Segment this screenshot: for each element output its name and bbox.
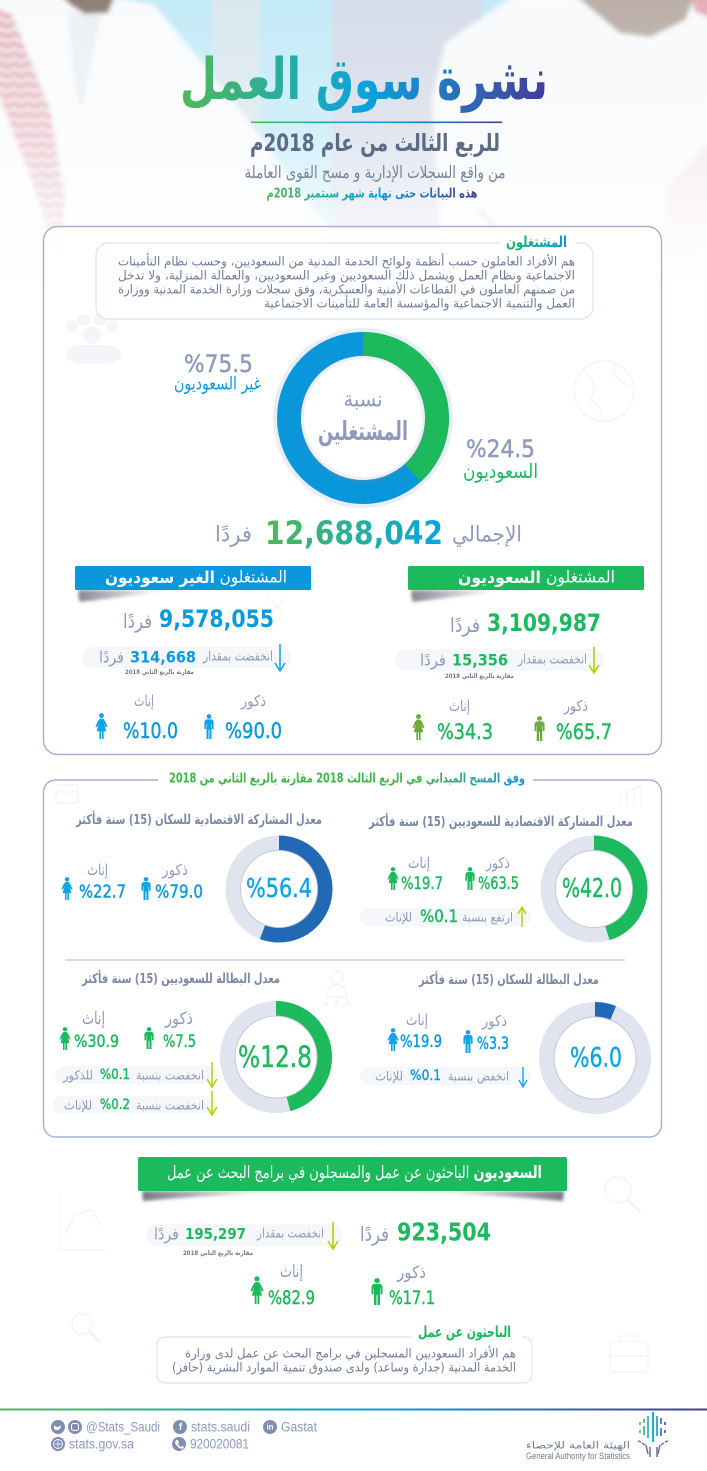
change callout: males: [55, 1062, 217, 1087]
icon: briefcase watermark: [610, 1336, 648, 1372]
gender split: [412, 697, 612, 744]
decrease callout: انخفضت بمقدار: [256, 1226, 324, 1242]
donut chart: employed share: المشتغلين: [318, 417, 408, 447]
label: non-Saudi share: غير السعوديون: [174, 374, 261, 394]
website: stats.gov.sa: [69, 1436, 134, 1452]
decrease callout: 314,668: [130, 648, 196, 666]
change callout: ارتفع بنسبة: [462, 910, 513, 926]
block: population participation rate: معدل المشاركة الاقتصادية للسكان (15) سنة فأكثر: [75, 811, 322, 828]
change callout: [360, 1067, 531, 1087]
icon: phone: [172, 1437, 186, 1451]
label: Saudi share: %24.5: [466, 435, 535, 463]
gender split: ذكور: [563, 697, 588, 715]
change callout: انخفض بنسبة: [448, 1068, 509, 1084]
donut chart: employed share: نسبة: [344, 388, 382, 412]
change callout: males: للذكور: [62, 1068, 93, 1084]
panel: non-Saudi employed: فردًا: [123, 609, 152, 633]
source line: من واقع السجلات الإدارية و مسح القوى العاملة: [244, 163, 506, 183]
panel: non-Saudi employed: المشتغلون الغير سعوديون: [105, 568, 287, 588]
total employed: فردًا: [215, 522, 252, 548]
definition box: job seekers: الخدمة المدنية (جدارة وساعد) ولدى صندوق تنمية الموارد البشرية (حافز): [172, 1360, 516, 1376]
gender split: إناث: [134, 692, 154, 710]
gender split: %17.1: [389, 1287, 435, 1309]
decrease callout: 15,356: [452, 650, 508, 670]
block: Saudi participation rate: [360, 813, 640, 935]
change callout: %0.1: [410, 1068, 441, 1084]
change callout: males: انخفضت بنسبة: [136, 1068, 204, 1082]
decrease callout: مقارنة بالربع الثاني 2018: [445, 672, 514, 680]
gender split: ذكور: [161, 861, 188, 879]
icon: briefcase watermark: [56, 785, 78, 803]
decrease callout: فردًا: [154, 1224, 179, 1244]
title: نشرة سوق العمل: [180, 47, 548, 113]
gender split: %30.9: [74, 1032, 119, 1052]
definition box: job seekers: هم الأفراد السعوديين المسجلين في برامج البحث عن عمل لدى وزارة: [185, 1346, 516, 1362]
panel: Saudi employed: 3,109,987: [487, 609, 601, 637]
panel: Saudi employed: فردًا: [450, 613, 480, 637]
icon: wrench watermark: [266, 595, 285, 615]
gender split: ذكور: [164, 1009, 193, 1029]
decrease callout: [395, 647, 604, 680]
decrease callout: [146, 1222, 343, 1257]
icon: linkedin: in: [266, 1422, 274, 1432]
icon: twitter: [51, 1420, 65, 1434]
decrease callout: مقارنة بالربع الثاني 2018: [125, 668, 194, 676]
change callout: للإناث: [375, 1068, 403, 1084]
icon: instagram: [68, 1420, 82, 1434]
decrease callout: انخفضت بمقدار: [202, 650, 273, 664]
banner: [138, 1157, 567, 1201]
block: Saudi unemployment rate: معدل البطالة للسعوديين (15) سنة فأكثر: [81, 970, 280, 987]
decrease callout: 195,297: [185, 1225, 246, 1243]
icon: line chart watermark: [60, 1195, 105, 1250]
linkedin name: Gastat: [281, 1420, 317, 1434]
change callout: females: [53, 1091, 217, 1115]
decrease callout: مقارنة بالربع الثاني 2018: [183, 1249, 253, 1257]
footer: social contacts: [51, 1420, 317, 1452]
gender split: [59, 1009, 196, 1052]
total seekers: فردًا: [360, 1222, 389, 1246]
definition heading: المشتغلون: [506, 233, 567, 251]
gender split: إناث: [87, 861, 108, 879]
block: Saudi participation rate: معدل المشاركة الاقتصادية للسعوديين (15) سنة فأكثر: [368, 813, 633, 830]
definition box: من ضمنهم العاملون في القطاعات الأمنية والعسكرية، وفق سجلات وزارة الخدمة المدنية ووزارة: [118, 282, 575, 298]
gender split: ذكور: [396, 1263, 426, 1283]
donut chart: employed share: [273, 328, 453, 508]
decrease callout: فردًا: [99, 648, 124, 668]
gender split: %79.0: [155, 882, 203, 902]
gender split: %65.7: [556, 720, 612, 744]
change callout: females: انخفضت بنسبة: [136, 1098, 204, 1112]
donut chart: %56.4: [246, 874, 312, 904]
block: Saudi unemployment rate: [53, 970, 324, 1115]
change callout: females: %0.2: [100, 1097, 130, 1113]
icon: facebook: [173, 1420, 187, 1434]
gender split: %10.0: [123, 719, 178, 743]
icon: globe watermark: [574, 361, 634, 421]
panel: non-Saudi employed: 9,578,055: [159, 605, 274, 633]
phone number: 920020081: [190, 1436, 249, 1452]
change callout: females: للإناث: [64, 1098, 92, 1112]
panel: field survey rates: [44, 772, 662, 1137]
gender split: ذكور: [240, 692, 266, 710]
gender split: إناث: [406, 1011, 428, 1029]
gender split: إناث: [82, 1009, 105, 1029]
gender split: إناث: [280, 1262, 303, 1282]
donut chart: %42.0: [562, 874, 622, 904]
icon: user and stars watermark: [324, 971, 350, 1005]
change callout: %0.1: [420, 907, 458, 927]
total employed: [215, 514, 522, 552]
hero photo background: [0, 0, 707, 310]
donut chart: %12.8: [238, 1040, 312, 1074]
gender split: %34.3: [437, 720, 493, 744]
total employed: الإجمالي: [452, 522, 522, 548]
donut chart: [228, 1008, 324, 1106]
gender split: %3.3: [477, 1034, 509, 1054]
gender split: إناث: [449, 697, 470, 715]
definition box: هم الأفراد العاملون حسب أنظمة ولوائح الخدمة المدنية من السعوديين، وحسب نظام التأمينات: [118, 252, 575, 270]
total seekers: 923,504: [397, 1218, 491, 1246]
definition box: [96, 238, 593, 319]
donut chart: %6.0: [570, 1042, 622, 1074]
gender split: [61, 861, 203, 902]
gender split: %19.7: [401, 874, 443, 894]
data date note: هذه البيانات حتى نهاية شهر سبتمبر 2018م: [266, 186, 478, 202]
block: population unemployment rate: معدل البطالة للسكان (15) سنة فأكثر: [418, 971, 599, 988]
gender split: إناث: [408, 854, 430, 872]
icon: magnifier watermark: [605, 1177, 640, 1212]
title rule: [251, 122, 502, 123]
gender split: %19.9: [400, 1032, 442, 1052]
decrease callout: انخفضت بمقدار: [517, 652, 587, 668]
subtitle: للربع الثالث من عام 2018م: [250, 129, 500, 157]
icon: people watermark: [66, 314, 122, 364]
gender split: [250, 1262, 435, 1309]
gender split: [387, 1011, 509, 1054]
banner: السعوديون الباحثون عن عمل والمسجلون في برامج البحث عن عمل: [167, 1163, 542, 1183]
icon: chart watermark: [620, 785, 642, 806]
icon: magnifier watermark small: [72, 1314, 100, 1342]
panel: Saudi employed: المشتغلون السعوديون: [458, 568, 615, 588]
gender split: [95, 692, 282, 743]
decrease callout: [82, 644, 292, 676]
panel: non-Saudi employed: [75, 566, 311, 743]
change callout: males: %0.1: [100, 1067, 130, 1083]
definition box: job seekers: [157, 1323, 532, 1383]
gender split: %90.0: [225, 719, 282, 743]
donut chart: [548, 843, 640, 935]
definition box: job seekers: الباحثون عن عمل: [418, 1323, 511, 1341]
icon: globe: [51, 1437, 65, 1451]
gender split: [387, 854, 519, 894]
handle: @Stats_Saudi: [86, 1420, 160, 1434]
change callout: للإناث: [385, 910, 412, 924]
panel: job seekers: [60, 1157, 648, 1383]
label: Saudi share: [463, 435, 538, 483]
donut chart: [546, 1010, 644, 1106]
total employed: 12,688,042: [265, 514, 443, 552]
panel: employed: [44, 226, 662, 754]
logo: General Authority for Statistics: الهيئة العامة للإحصاء: [526, 1440, 630, 1452]
logo: General Authority for Statistics: [526, 1412, 668, 1461]
section heading: وفق المسح الميداني في الربع الثالث 2018 مقارنة بالربع الثاني من 2018: [169, 772, 525, 786]
gender split: %63.5: [478, 874, 519, 894]
footer rule: [0, 1408, 707, 1410]
label: non-Saudi share: [174, 350, 261, 394]
label: non-Saudi share: %75.5: [184, 350, 253, 378]
definition box: الاجتماعية ونظام العمل ويشمل ذلك السعوديين وغير السعوديين، والعمالة المنزلية، ولا تدخل: [118, 268, 575, 284]
gender split: ذكور: [481, 1012, 507, 1030]
change callout: [360, 907, 531, 927]
panel: Saudi employed: [395, 566, 644, 744]
logo mark: [638, 1412, 668, 1457]
facebook name: stats.saudi: [191, 1420, 250, 1434]
gender split: %22.7: [79, 882, 126, 902]
icon: facebook: f: [179, 1422, 183, 1433]
block: population unemployment rate: [360, 971, 644, 1106]
logo: General Authority for Statistics: General Authority for Statistics: [526, 1451, 630, 1461]
gender split: ذكور: [485, 854, 510, 872]
gender split: %7.5: [163, 1032, 196, 1052]
label: Saudi share: السعوديون: [463, 459, 538, 483]
donut chart: [233, 843, 325, 935]
block: population participation rate: [61, 811, 325, 935]
total seekers: [360, 1218, 491, 1246]
icon: linkedin: [263, 1420, 277, 1434]
gender split: %82.9: [268, 1287, 315, 1309]
decrease callout: فردًا: [420, 650, 446, 670]
definition box: العمل والتنمية الاجتماعية والمؤسسة العامة للتأمينات الاجتماعية: [264, 294, 575, 312]
